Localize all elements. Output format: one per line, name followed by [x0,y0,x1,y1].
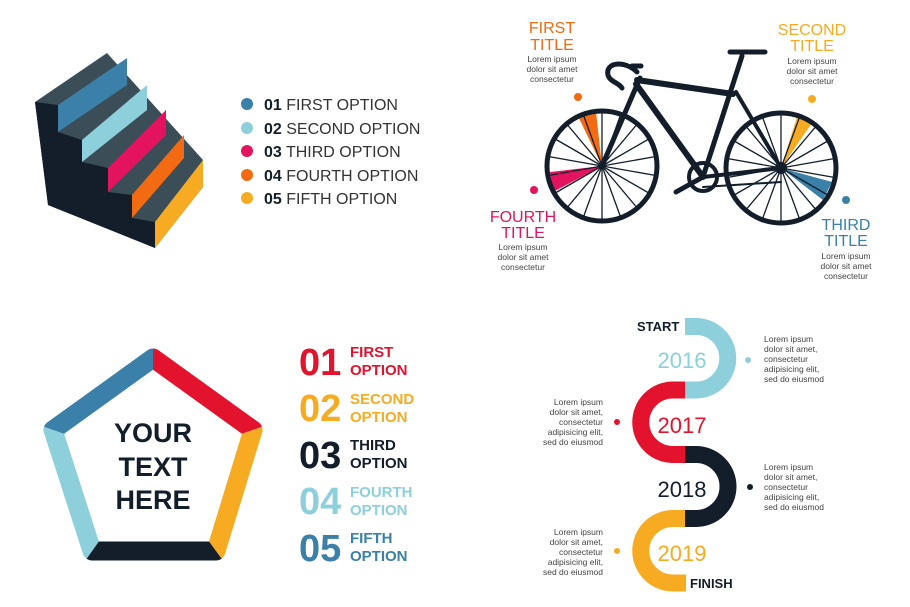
wheel: rear [726,112,836,224]
panel: timeline [543,319,824,591]
list: numbered options: OPTION [350,409,408,426]
timeline notes: consectetur [764,482,808,492]
timeline notes [543,334,824,577]
timeline notes: consectetur [559,547,603,557]
panel: timeline: FINISH [690,576,733,591]
label: third title: TITLE [824,233,868,250]
label: first title: Lorem ipsum [527,54,577,64]
riser: blue [58,58,127,132]
pentagon text: HERE [115,485,191,515]
timeline notes: sed do eiusmod [543,567,603,577]
timeline notes: consectetur [559,417,603,427]
pentagon text: TEXT [118,452,188,482]
list: numbered options: FIRST [350,344,393,361]
timeline notes: dolor sit amet, [764,344,817,354]
timeline notes: sed do eiusmod [764,502,824,512]
pentagon text [114,418,192,515]
label: fourth title: TITLE [501,225,545,242]
label: second title: SECOND [778,22,846,39]
bike frame [602,52,781,192]
legend: stair options: 02 SECOND OPTION [264,121,420,138]
riser: light blue [82,85,147,162]
timeline notes: adipisicing elit, [764,492,819,502]
timeline notes: Lorem ipsum [764,462,813,472]
timeline notes: dolor sit amet, [550,537,603,547]
label: first title: dolor sit amet [526,64,578,74]
list: numbered options: OPTION [350,362,408,379]
list: numbered options: 04 [299,481,341,523]
panel: timeline: 2019 [658,541,706,566]
label: third title: dolor sit amet [820,261,872,271]
riser: yellow [155,160,203,248]
timeline notes: Lorem ipsum [554,397,603,407]
label: second title: consectetur [790,76,834,86]
legend: stair options: 05 FIFTH OPTION [264,191,397,208]
list: numbered options: OPTION [350,548,408,565]
label: first title: TITLE [530,37,574,54]
list: numbered options: FIFTH [350,530,392,547]
label: second title [778,22,846,103]
label: third title [820,196,872,281]
list: numbered options: OPTION [350,502,408,519]
label: first title: FIRST [529,20,575,37]
panel: timeline: 2017 [658,413,706,438]
label: second title: Lorem ipsum [787,56,837,66]
label: fourth title: FOURTH [490,209,556,226]
panel: timeline: 2016 [658,348,706,373]
legend: stair options: 04 FOURTH OPTION [264,168,418,185]
label: first title: consectetur [530,74,574,84]
timeline notes: adipisicing elit, [764,364,819,374]
label: second title: TITLE [790,38,834,55]
label: fourth title [490,186,556,272]
list: numbered options: 01 [299,342,341,384]
label: fourth title: dolor sit amet [497,252,549,262]
legend: stair options: 01 FIRST OPTION [264,97,398,114]
label: third title: consectetur [824,271,868,281]
list: numbered options: 03 [299,435,341,477]
timeline notes: consectetur [764,354,808,364]
timeline years: START [637,319,679,334]
riser: orange [132,135,184,218]
legend: stair options: 03 THIRD OPTION [264,144,401,161]
timeline notes: sed do eiusmod [543,437,603,447]
label: first title [526,20,582,101]
panel: pentagon [53,358,253,551]
list: numbered options: 02 [299,388,341,430]
timeline notes: adipisicing elit, [548,557,603,567]
label: third title: THIRD [822,217,870,234]
timeline notes: Lorem ipsum [554,527,603,537]
label: fourth title: Lorem ipsum [498,242,548,252]
timeline notes: Lorem ipsum [764,334,813,344]
panel: bicycle [490,20,872,281]
label: second title: dolor sit amet [786,66,838,76]
legend: stair options [241,97,420,208]
panel: stairs [35,53,203,248]
wheel: front [547,110,657,222]
timeline notes: dolor sit amet, [550,407,603,417]
panel: timeline: 2018 [658,477,706,502]
label: third title: Lorem ipsum [821,251,871,261]
list: numbered options: THIRD [350,437,396,454]
timeline notes: dolor sit amet, [764,472,817,482]
label: fourth title: consectetur [501,262,545,272]
list: numbered options: OPTION [350,455,408,472]
list: numbered options: SECOND [350,391,414,408]
timeline notes: sed do eiusmod [764,374,824,384]
stairs body [35,53,203,248]
list: numbered options: 05 [299,528,341,570]
timeline notes: adipisicing elit, [548,427,603,437]
list: numbered options [299,342,414,570]
list: numbered options: FOURTH [350,484,412,501]
pentagon text: YOUR [114,418,192,448]
riser: pink [108,110,166,192]
